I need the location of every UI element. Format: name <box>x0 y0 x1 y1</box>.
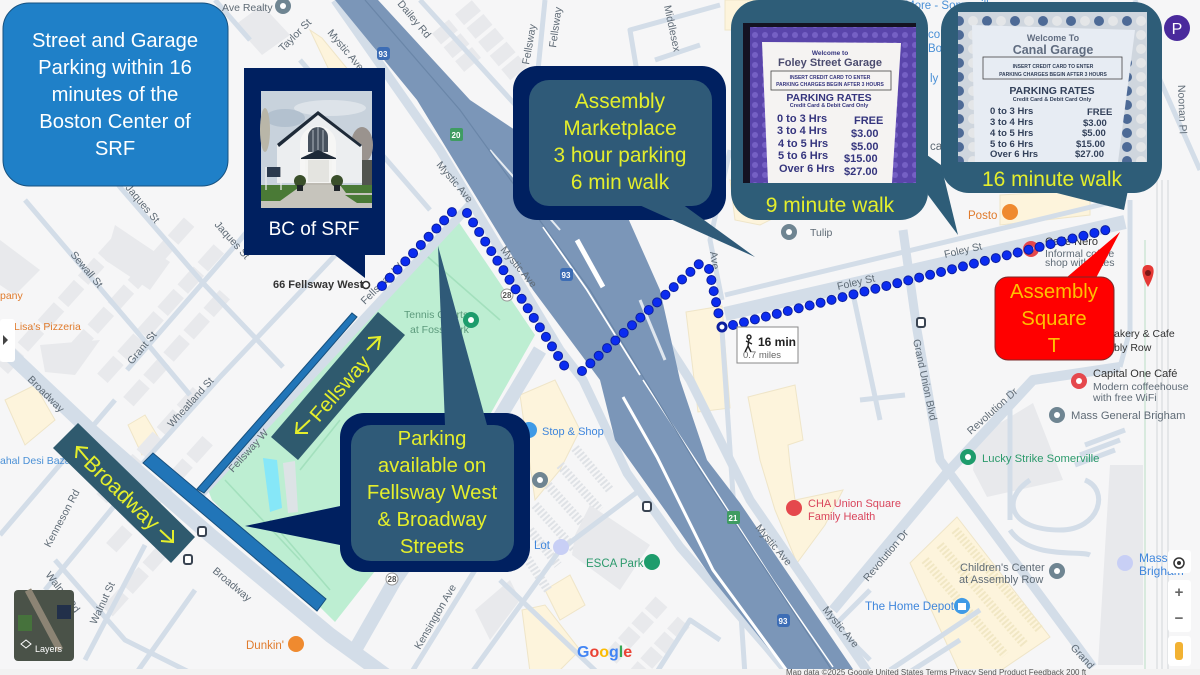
map labels: Walnut Rd <box>43 569 82 615</box>
callout: Canal Garage sign: 16 minute walk <box>982 168 1123 191</box>
park: Foss Park <box>208 218 535 622</box>
highway shields: 21 <box>729 514 738 523</box>
parking bar: Broadway <box>143 453 326 611</box>
photo: Foley Street Garage rates: $5.00 <box>851 141 879 153</box>
map labels: akery & Cafe <box>1114 328 1175 340</box>
map labels: Taylor St <box>277 17 314 54</box>
map labels: Mystic Ave <box>325 27 366 73</box>
callout: parking on Fellsway West and Broadway <box>245 246 530 572</box>
map labels: Fellsway <box>520 22 539 66</box>
photo: Canal Garage rates: PARKING CHARGES BEGIN AFTER 3 HOURS <box>999 72 1108 78</box>
callout: Assembly Square T: Square <box>1021 308 1087 330</box>
map labels: Mystic Ave <box>753 522 794 568</box>
route start marker <box>718 323 726 331</box>
Google map controls <box>0 319 1200 675</box>
photo: Foley Street Garage rates: Over 6 Hrs <box>779 163 835 175</box>
photo: Foley Street Garage rates: 3 to 4 Hrs <box>777 125 827 137</box>
photo: Foley Street Garage rates: INSERT CREDIT CARD TO ENTER <box>790 75 871 81</box>
photo: Foley Street Garage rates: Welcome to <box>812 50 848 57</box>
photo: Foley Street Garage rates: PARKING CHARGES BEGIN AFTER 3 HOURS <box>776 82 885 88</box>
title callout: Boston Center of <box>39 111 191 133</box>
map labels: Fellsway <box>547 6 565 48</box>
photo: Foley Street Garage rates: 0 to 3 Hrs <box>777 113 827 125</box>
map labels: Bos <box>928 43 948 55</box>
map labels: Fellsway W <box>226 427 271 475</box>
photo: Canal Garage rates: 5 to 6 Hrs <box>990 139 1033 150</box>
layers button <box>14 590 74 661</box>
callout: Foley Street Garage sign <box>731 0 958 235</box>
photo: Canal Garage rates: Canal Garage <box>1013 43 1093 57</box>
map labels: Lisa's Pizzeria <box>14 321 81 333</box>
callout: BC of SRF <box>244 68 385 278</box>
map labels: Capital One Café <box>1093 368 1177 380</box>
photo: Canal Garage rates: Credit Card & Debit Card Only <box>1013 97 1092 103</box>
map pins: P <box>1172 21 1182 38</box>
map labels: Jaques St <box>212 219 252 262</box>
map labels: Wheatland St <box>165 375 216 430</box>
map labels: Kensington Ave <box>412 582 459 652</box>
route duration tag: 16 min <box>758 335 796 349</box>
callout: Assembly Marketplace <box>513 66 755 257</box>
title callout: SRF <box>95 138 135 160</box>
title callout: minutes of the <box>52 84 178 106</box>
callout: Foley Street Garage sign: 9 minute walk <box>766 194 895 217</box>
map labels: Fellsway W <box>359 261 405 307</box>
map labels: shop with bites <box>1045 257 1114 269</box>
map labels: Mystic Ave <box>498 244 539 290</box>
map labels: at Foss Park <box>410 324 470 336</box>
map labels: co <box>928 29 940 41</box>
route duration tag <box>737 327 798 363</box>
map labels: Noonan Pl <box>1175 85 1189 134</box>
label: Fellsway: Fellsway <box>305 351 375 426</box>
map labels: Ave <box>707 251 721 270</box>
walking route dots <box>382 211 1106 371</box>
destination label: 66 Fellsway West: 66 Fellsway West <box>273 279 364 291</box>
label: Broadway: Broadway <box>79 451 165 535</box>
map labels: Mass <box>1139 551 1168 565</box>
map labels: Brigham <box>1139 564 1184 578</box>
map labels: with free WiFi <box>1092 392 1157 404</box>
church photo <box>260 91 373 208</box>
photo: Foley Street Garage rates: PARKING RATES <box>786 92 872 104</box>
photo: Canal Garage rates: 0 to 3 Hrs <box>990 106 1033 117</box>
highway shields: 93 <box>779 617 788 626</box>
photo: Canal Garage rates: Welcome To <box>1027 33 1080 43</box>
layers button: Layers <box>35 644 63 654</box>
callout: BC of SRF: BC of SRF <box>269 219 359 240</box>
photo: Foley Street Garage rates: FREE <box>854 115 883 127</box>
map labels: ca <box>930 141 943 153</box>
map labels: Walnut St <box>88 580 118 626</box>
map labels: Grant St <box>125 329 159 367</box>
map labels: Tennis Courts <box>404 309 468 321</box>
callout: parking on Fellsway West and Broadway: Parking <box>398 428 466 450</box>
map labels: More - Somerville <box>905 0 995 12</box>
highway shields: 28 <box>388 575 397 584</box>
callout: Assembly Marketplace: Assembly <box>575 90 666 113</box>
map labels: Google <box>577 644 632 661</box>
photo: Canal Garage rates <box>958 12 1147 162</box>
highway shields: 93 <box>379 50 388 59</box>
callout: Assembly Square T: T <box>1048 335 1060 357</box>
map labels: Family Health <box>808 511 875 523</box>
photo: Foley Street Garage rates: $15.00 <box>844 153 878 165</box>
photo: Canal Garage rates: PARKING RATES <box>1009 85 1095 97</box>
map labels: Jaques St <box>123 182 162 226</box>
map labels: Tulip <box>810 227 833 239</box>
photo: Foley Street Garage rates: Foley Street Garage <box>778 57 882 69</box>
map labels: ly <box>930 73 939 85</box>
photo: Canal Garage rates: $5.00 <box>1082 128 1106 139</box>
callout: parking on Fellsway West and Broadway: Fellsway West <box>367 482 498 504</box>
map labels: Stop & Shop <box>542 426 604 438</box>
callout: Assembly Marketplace: Marketplace <box>563 117 677 140</box>
route duration tag: 0.7 miles <box>743 350 781 361</box>
callout: parking on Fellsway West and Broadway: & Broadway <box>377 509 488 531</box>
map labels: Mystic Ave <box>820 604 861 650</box>
highway shields: 93 <box>562 271 571 280</box>
map labels: Ave Realty <box>222 2 273 14</box>
callout: parking on Fellsway West and Broadway: available on <box>378 455 486 477</box>
map labels: Grand <box>1068 642 1096 672</box>
map labels: Mystic Ave <box>434 159 475 205</box>
callout: parking on Fellsway West and Broadway: Streets <box>400 536 464 558</box>
Google map controls: + <box>1175 584 1184 601</box>
rail tracks <box>1145 180 1168 675</box>
map labels: Foley St <box>836 273 876 293</box>
photo: Canal Garage rates: Over 6 Hrs <box>990 149 1038 160</box>
callout: Assembly Marketplace: 6 min walk <box>571 171 670 194</box>
map labels: The Home Depot <box>865 600 955 613</box>
photo: Canal Garage rates: $27.00 <box>1075 149 1104 160</box>
map labels: Posto <box>968 210 997 222</box>
map labels: Sewall St <box>68 249 105 291</box>
map labels: Kenneson Rd <box>42 487 83 549</box>
callout: Assembly Marketplace: 3 hour parking <box>554 144 686 167</box>
map labels: Revolution Dr <box>861 527 912 584</box>
map labels: Grand Union Blvd <box>910 338 939 422</box>
map labels: Children's Center <box>960 562 1045 574</box>
map labels: Middlesex <box>661 4 683 54</box>
map labels: CHA Union Square <box>808 498 901 510</box>
map labels: bly Row <box>1114 342 1152 354</box>
map labels: Broadway <box>25 374 67 416</box>
map labels: Revolution Dr <box>965 385 1021 437</box>
map labels: Mass General Brigham <box>1071 410 1185 422</box>
map labels: Lucky Strike Somerville <box>982 453 1099 465</box>
callout: Canal Garage sign <box>941 2 1162 210</box>
map labels: Informal coffee <box>1045 248 1114 260</box>
photo: Canal Garage rates: 4 to 5 Hrs <box>990 128 1033 139</box>
highway shields: 20 <box>452 131 461 140</box>
map labels: Lot <box>534 540 551 552</box>
photo: Canal Garage rates: 3 to 4 Hrs <box>990 117 1033 128</box>
title callout: Parking within 16 <box>38 57 192 79</box>
photo: Foley Street Garage rates: Credit Card & Debit Card Only <box>790 103 869 109</box>
photo: Foley Street Garage rates <box>743 23 916 183</box>
map labels: Modern coffeehouse <box>1093 381 1189 393</box>
map labels: Foley St <box>943 241 983 261</box>
callout: Assembly Square T: Assembly <box>1010 281 1099 303</box>
highway shields <box>377 47 790 627</box>
interstate 93 <box>335 0 857 675</box>
photo: Foley Street Garage rates: 4 to 5 Hrs <box>778 138 828 150</box>
title callout <box>3 3 228 186</box>
map labels: Dunkin' <box>246 640 284 652</box>
photo: Foley Street Garage rates: $3.00 <box>851 128 879 140</box>
label: Broadway <box>53 423 195 563</box>
photo: Canal Garage rates: $3.00 <box>1083 118 1107 129</box>
map labels: at Assembly Row <box>959 574 1043 586</box>
parking bar: Fellsway West <box>197 313 357 493</box>
Google map controls: − <box>1175 610 1184 627</box>
photo: Foley Street Garage rates: 5 to 6 Hrs <box>778 150 828 162</box>
label: Fellsway <box>271 312 405 460</box>
map labels: Broadway <box>210 565 254 605</box>
map labels: ahal Desi Bazaar <box>0 455 80 467</box>
photo: Canal Garage rates: FREE <box>1087 107 1112 118</box>
map labels: ESCA Park <box>586 558 644 570</box>
map labels: Caffe Nero <box>1045 236 1098 248</box>
park paths and pool <box>225 250 500 590</box>
title callout: Street and Garage <box>32 30 198 52</box>
striped parking lot <box>525 448 1040 655</box>
photo: Foley Street Garage rates: $27.00 <box>844 166 878 178</box>
map labels: pany <box>0 290 24 302</box>
photo: Canal Garage rates: $15.00 <box>1076 139 1105 150</box>
callout: Assembly Square T <box>995 232 1120 360</box>
highway shields: 28 <box>503 291 512 300</box>
photo: Canal Garage rates: INSERT CREDIT CARD TO ENTER <box>1013 64 1094 70</box>
